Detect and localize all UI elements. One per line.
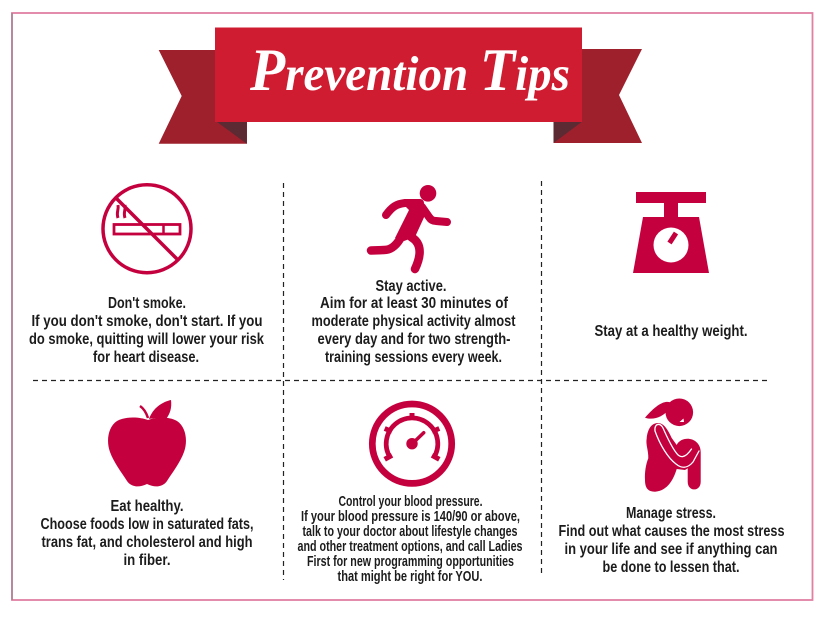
text: don't smoke: for heart disease. — [93, 349, 199, 366]
text: blood pressure: and other treatment options, and call Ladies — [298, 539, 522, 555]
text: eat healthy: in fiber. — [124, 552, 170, 569]
text: eat healthy — [40, 498, 254, 569]
text: blood pressure: Control your blood pressure. — [338, 494, 482, 510]
panel: stay active — [312, 185, 516, 366]
icon: runner — [371, 185, 447, 269]
text: blood pressure: If your blood pressure is 140/90 or above, — [301, 509, 520, 525]
panel: don't smoke — [29, 185, 264, 366]
text: stay active: training sessions every week. — [325, 349, 502, 366]
panel: eat healthy — [40, 400, 254, 569]
icon: seated figure — [645, 398, 701, 492]
panel: blood pressure — [298, 404, 522, 585]
text: eat healthy: trans fat, and cholesterol and high — [42, 534, 252, 551]
text: don't smoke: do smoke, quitting will lower your risk — [29, 331, 264, 348]
text: stay active: every day and for two strength- — [318, 331, 510, 348]
text: don't smoke — [29, 295, 264, 366]
title banner — [159, 28, 642, 144]
text: don't smoke: If you don't smoke, don't start. If you — [32, 313, 262, 330]
icon: gauge — [372, 404, 452, 483]
text: don't smoke: Don't smoke. — [108, 295, 186, 312]
panel: healthy weight — [594, 192, 748, 340]
text: eat healthy: Choose foods low in saturated fats, — [40, 516, 254, 533]
text: manage stress — [558, 505, 785, 576]
text: stay active — [312, 278, 516, 366]
icon: no smoking — [103, 185, 191, 273]
text: eat healthy: Eat healthy. — [110, 498, 184, 515]
text: blood pressure: First for new programming opportunities — [307, 554, 514, 570]
text: stay active: moderate physical activity almost — [312, 313, 516, 330]
icon: scale — [633, 192, 709, 273]
text: manage stress: Manage stress. — [626, 505, 716, 522]
panel: manage stress — [558, 398, 785, 576]
text: blood pressure: that might be right for YOU. — [338, 569, 482, 585]
text: manage stress: in your life and see if anything can — [564, 541, 778, 558]
text: stay active: Aim for at least 30 minutes of — [320, 295, 509, 312]
text: manage stress: be done to lessen that. — [602, 559, 740, 576]
text: stay active: Stay active. — [376, 278, 446, 295]
icon: apple — [108, 400, 186, 486]
text: blood pressure: talk to your doctor about lifestyle changes — [302, 524, 518, 540]
text: blood pressure — [298, 494, 522, 585]
text: healthy weight: Stay at a healthy weight. — [594, 323, 748, 340]
title: Prevention Tips — [249, 37, 570, 103]
